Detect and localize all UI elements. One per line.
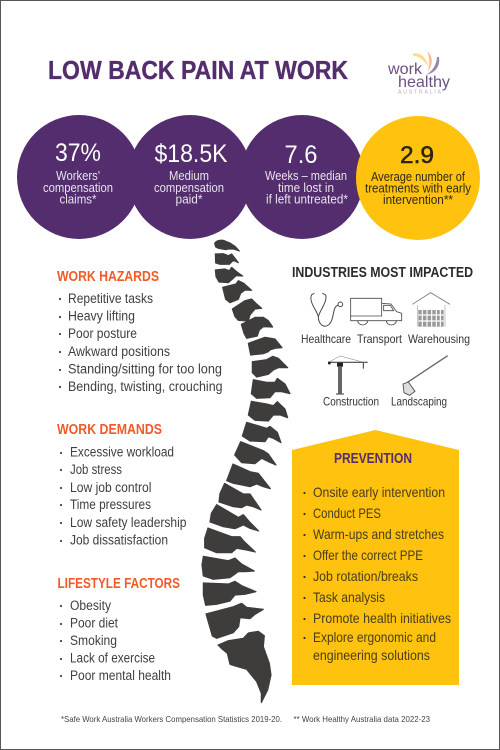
logo: Work Healthy Australia: healthy [398,74,450,91]
stat circle: $18.5K: compensation [154,181,224,195]
stat circle: 37%: Workers' [56,169,100,183]
footnotes: *Safe Work Australia Workers Compensation Statistics 2019-20. [61,714,282,724]
stat circle: 2.9: Average number of [371,170,465,184]
stat circle: 37%: compensation [43,181,113,195]
label: healthcare: Healthcare [301,332,351,346]
stat circle: $18.5K: Medium [169,169,209,183]
panel: lifestyle factors: Lack of exercise [70,650,155,666]
panel: work demands: Job stress [70,462,122,477]
stat circle: 37% [17,115,141,239]
stat circle: 2.9 [356,116,480,240]
stat circle: 37%: claims* [60,192,97,206]
panel: work demands: Time pressures [70,497,151,512]
icon: warehouse [412,293,450,327]
panel: work demands: Low safety leadership [70,515,186,530]
label: construction: Construction [323,394,379,408]
stat circle: 37%: 37% [55,139,101,167]
panel: industries most impacted [292,265,473,408]
icon: stethoscope [311,293,343,326]
stat circle: $18.5K: $18.5K [154,140,228,168]
stat circle: 7.6: Weeks – median [265,169,347,183]
footnotes [61,714,430,724]
panel: work hazards: Poor posture [68,326,137,341]
list: prevention measures: Conduct PES [313,505,381,521]
panel: work demands: Excessive workload [70,444,174,460]
list: prevention measures: Onsite early intervention [313,484,445,500]
stat circle: 7.6: time lost in [278,181,334,195]
panel: work hazards [57,269,222,394]
list: prevention measures: Task analysis [313,589,385,605]
logo: Work Healthy Australia [387,51,450,96]
logo: Work Healthy Australia: work [387,61,423,78]
panel: work demands [57,422,186,548]
panel: work hazards: Repetitive tasks [68,291,153,306]
label: transport: Transport [357,332,403,346]
panel: prevention [292,430,459,685]
logo: Work Healthy Australia: AUSTRALIA [398,90,442,96]
heading: prevention: PREVENTION [334,451,412,467]
icon: crane [328,356,368,394]
panel: lifestyle factors: Obesity [70,598,111,613]
footnotes: ** Work Healthy Australia data 2022-23 [294,714,430,724]
stat circle: 7.6 [240,115,364,239]
list: prevention measures: Promote health initiatives [313,610,451,626]
panel: lifestyle factors: Poor mental health [70,668,171,683]
panel: work demands: Low job control [70,480,152,495]
list: prevention measures: Warm-ups and stretches [313,526,444,542]
list: prevention measures: engineering solutions [313,647,430,663]
title: LOW BACK PAIN AT WORK [48,55,348,85]
stat circle: 2.9: intervention** [383,193,453,207]
icon: truck [351,298,402,325]
panel: work hazards: Heavy lifting [68,308,135,324]
panel: work demands: Job dissatisfaction [70,532,168,548]
panel: lifestyle factors: Poor diet [70,616,118,630]
panel: work demands: WORK DEMANDS [57,422,162,438]
list: prevention measures: Job rotation/breaks [313,568,418,584]
heading: industries: INDUSTRIES MOST IMPACTED [292,265,473,281]
list: prevention measures: Explore ergonomic and [313,629,436,645]
stat circle: 7.6: 7.6 [284,141,318,169]
stat circle: 7.6: if left untreated* [266,192,348,206]
panel: work hazards: Awkward positions [68,344,170,359]
icon: landscaping hoe [403,356,448,395]
label: warehousing: Warehousing [408,332,470,346]
panel: work hazards: Bending, twisting, crouching [68,379,222,394]
stat circle: $18.5K: paid* [176,192,203,206]
stat circle: 2.9: 2.9 [400,142,434,169]
panel: lifestyle factors: LIFESTYLE FACTORS [58,576,180,592]
list: prevention measures [303,484,451,663]
panel: lifestyle factors [58,576,180,683]
stat circle: $18.5K [128,115,252,239]
panel: work hazards: WORK HAZARDS [57,269,159,285]
stat circle: 2.9: treatments with early [365,182,472,196]
label: landscaping: Landscaping [391,394,447,408]
list: prevention measures: Offer the correct PPE [313,547,423,563]
illustration: spine [202,240,290,703]
panel: lifestyle factors: Smoking [70,633,117,648]
panel: work hazards: Standing/sitting for too long [68,362,222,376]
